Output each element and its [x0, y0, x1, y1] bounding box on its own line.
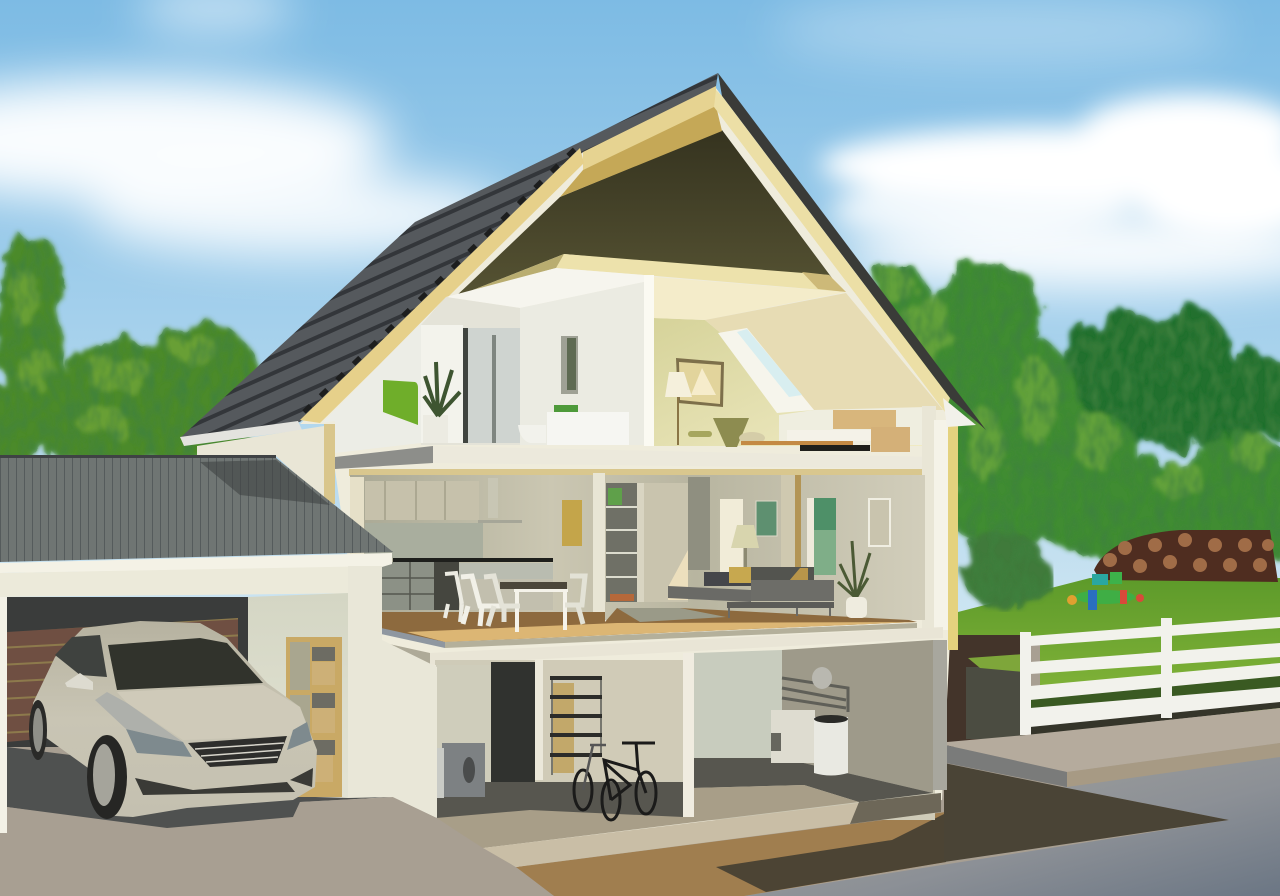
washer: [436, 743, 485, 798]
bedroom: [654, 277, 943, 452]
car: [29, 621, 317, 819]
garage opening: [0, 566, 437, 833]
eave: [180, 421, 302, 446]
trees: left: [0, 235, 261, 470]
clouds: [0, 0, 1280, 290]
gable wall: [322, 297, 446, 453]
lawn: [958, 578, 1280, 712]
wall divider: [644, 275, 654, 446]
house body: [300, 88, 950, 867]
bathroom: [421, 268, 644, 445]
driveway right: [744, 755, 1280, 896]
dirt trench: [516, 812, 946, 896]
bicycle: [574, 742, 656, 820]
garage upper wall by house: [197, 424, 335, 504]
shelf: [550, 678, 602, 775]
garage cabinet: [286, 637, 342, 797]
garage roof: [0, 455, 393, 562]
fence: [1020, 617, 1280, 735]
dining set: [445, 573, 585, 632]
water heater and appliances: [771, 667, 848, 776]
basement: [420, 640, 947, 867]
retaining wall: [946, 635, 1026, 747]
log pile: [1094, 530, 1278, 582]
shrub: [961, 532, 1049, 608]
concrete ledge: [936, 708, 1280, 862]
upper floor slab: [335, 446, 934, 476]
attic: [455, 84, 832, 297]
right roof edge: [714, 73, 986, 430]
right column and gutter: [922, 398, 976, 650]
kitchen and living room: [350, 473, 925, 620]
plant and green panel: [383, 362, 460, 443]
sky: [0, 0, 1280, 640]
ceiling beam: [446, 254, 846, 298]
wood floor: [381, 608, 917, 648]
playset: [1067, 572, 1144, 610]
sofa and plant: [668, 541, 870, 618]
garage fascia: [0, 553, 392, 597]
main roof: [180, 73, 718, 438]
main floor slab: [380, 627, 943, 665]
garage floor: [7, 747, 393, 828]
roof wood trim: [300, 148, 584, 423]
trees: right: [865, 262, 1280, 558]
